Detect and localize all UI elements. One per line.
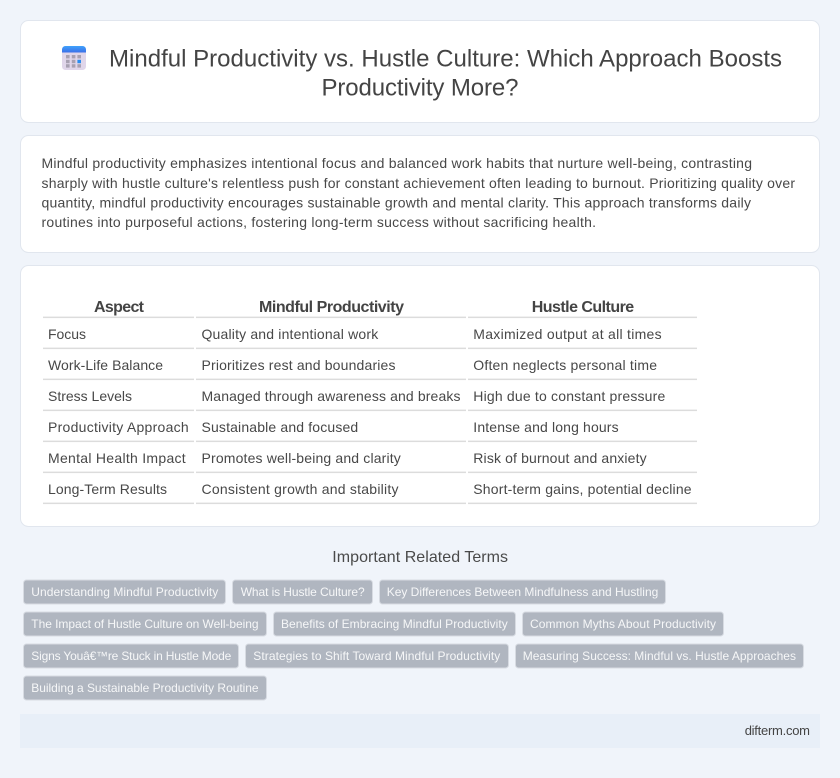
row: Productivity Approach: Intense and long hours bbox=[473, 419, 619, 435]
footer credit: difterm.com bbox=[745, 723, 810, 738]
tag bbox=[380, 580, 666, 604]
title: Mindful Productivity vs. Hustle Culture: Which Approach Boosts bbox=[109, 46, 782, 72]
comparison table bbox=[43, 299, 697, 504]
related terms tags bbox=[24, 580, 804, 700]
tag bbox=[274, 612, 516, 636]
row: Stress Levels bbox=[48, 388, 666, 404]
tag: Signs Youâ€™re Stuck in Hustle Mode bbox=[31, 649, 232, 663]
row: Work-Life Balance bbox=[48, 357, 657, 373]
tag bbox=[24, 580, 226, 604]
row: Work-Life Balance: Often neglects personal time bbox=[473, 357, 657, 373]
text block: intro: sharply with hustle culture's relentless push for constant achievement often leading to burnout. Prioritizing quality over bbox=[42, 175, 795, 191]
tag: Key Differences Between Mindfulness and Hustling bbox=[387, 585, 658, 599]
tag bbox=[516, 644, 804, 668]
tag bbox=[24, 644, 238, 668]
row: Long-Term Results: Consistent growth and stability bbox=[202, 481, 398, 497]
panel: comparison table bbox=[20, 266, 820, 526]
tag bbox=[232, 580, 372, 604]
text block: intro: Mindful productivity emphasizes intentional focus and balanced work habits that nurture well-being, contrasting bbox=[42, 155, 752, 171]
tag bbox=[246, 644, 508, 668]
table header: Hustle Culture bbox=[532, 299, 634, 316]
row: Stress Levels: Managed through awareness and breaks bbox=[202, 388, 460, 404]
row: Long-Term Results bbox=[48, 481, 692, 497]
row: Mental Health Impact: Mental Health Impact bbox=[48, 450, 186, 466]
text block: intro: quantity, mindful productivity encourages sustainable growth and mental clarity. This approach transforms daily bbox=[42, 194, 751, 210]
tag bbox=[24, 676, 266, 700]
tag: Common Myths About Productivity bbox=[530, 617, 716, 631]
row: Work-Life Balance: Work-Life Balance bbox=[48, 357, 163, 373]
row: Mental Health Impact bbox=[48, 450, 647, 466]
tag bbox=[522, 612, 724, 636]
table header: Mindful Productivity bbox=[259, 299, 404, 316]
text block: intro: routines into purposeful actions, fostering long-term success without sacrificing health. bbox=[42, 214, 596, 230]
heading: related terms: Important Related Terms bbox=[332, 549, 508, 566]
panel: intro paragraph bbox=[20, 136, 820, 252]
tag: Strategies to Shift Toward Mindful Productivity bbox=[253, 649, 500, 663]
tag: Understanding Mindful Productivity bbox=[31, 585, 218, 599]
row: Mental Health Impact: Risk of burnout and anxiety bbox=[473, 450, 647, 466]
row: Long-Term Results: Long-Term Results bbox=[48, 481, 167, 497]
row: Work-Life Balance: Prioritizes rest and boundaries bbox=[202, 357, 396, 373]
icon: calendar bbox=[62, 46, 86, 70]
panel: header bbox=[20, 20, 820, 122]
row: Stress Levels: Stress Levels bbox=[48, 388, 132, 404]
text block: intro bbox=[42, 155, 795, 230]
row: Long-Term Results: Short-term gains, potential decline bbox=[473, 481, 692, 497]
row: Focus: Maximized output at all times bbox=[473, 326, 662, 342]
row: Focus bbox=[48, 326, 662, 342]
row: Focus: Quality and intentional work bbox=[202, 326, 379, 342]
row: Focus: Focus bbox=[48, 326, 86, 342]
tag: What is Hustle Culture? bbox=[241, 585, 365, 599]
footer bar bbox=[20, 714, 820, 748]
title bbox=[109, 46, 782, 102]
tag: The Impact of Hustle Culture on Well-being bbox=[31, 617, 259, 631]
tag: Measuring Success: Mindful vs. Hustle Approaches bbox=[523, 649, 796, 663]
tag: Benefits of Embracing Mindful Productivity bbox=[281, 617, 508, 631]
row: Productivity Approach bbox=[48, 419, 619, 435]
title: Productivity More? bbox=[322, 74, 518, 102]
row: Productivity Approach: Productivity Approach bbox=[48, 419, 189, 435]
table header bbox=[94, 299, 634, 316]
tag: Building a Sustainable Productivity Routine bbox=[31, 681, 259, 695]
row: Productivity Approach: Sustainable and focused bbox=[202, 419, 358, 435]
tag bbox=[24, 612, 266, 636]
table header: Aspect bbox=[94, 299, 145, 316]
row: Stress Levels: High due to constant pressure bbox=[473, 388, 666, 404]
row: Mental Health Impact: Promotes well-being and clarity bbox=[202, 450, 401, 466]
